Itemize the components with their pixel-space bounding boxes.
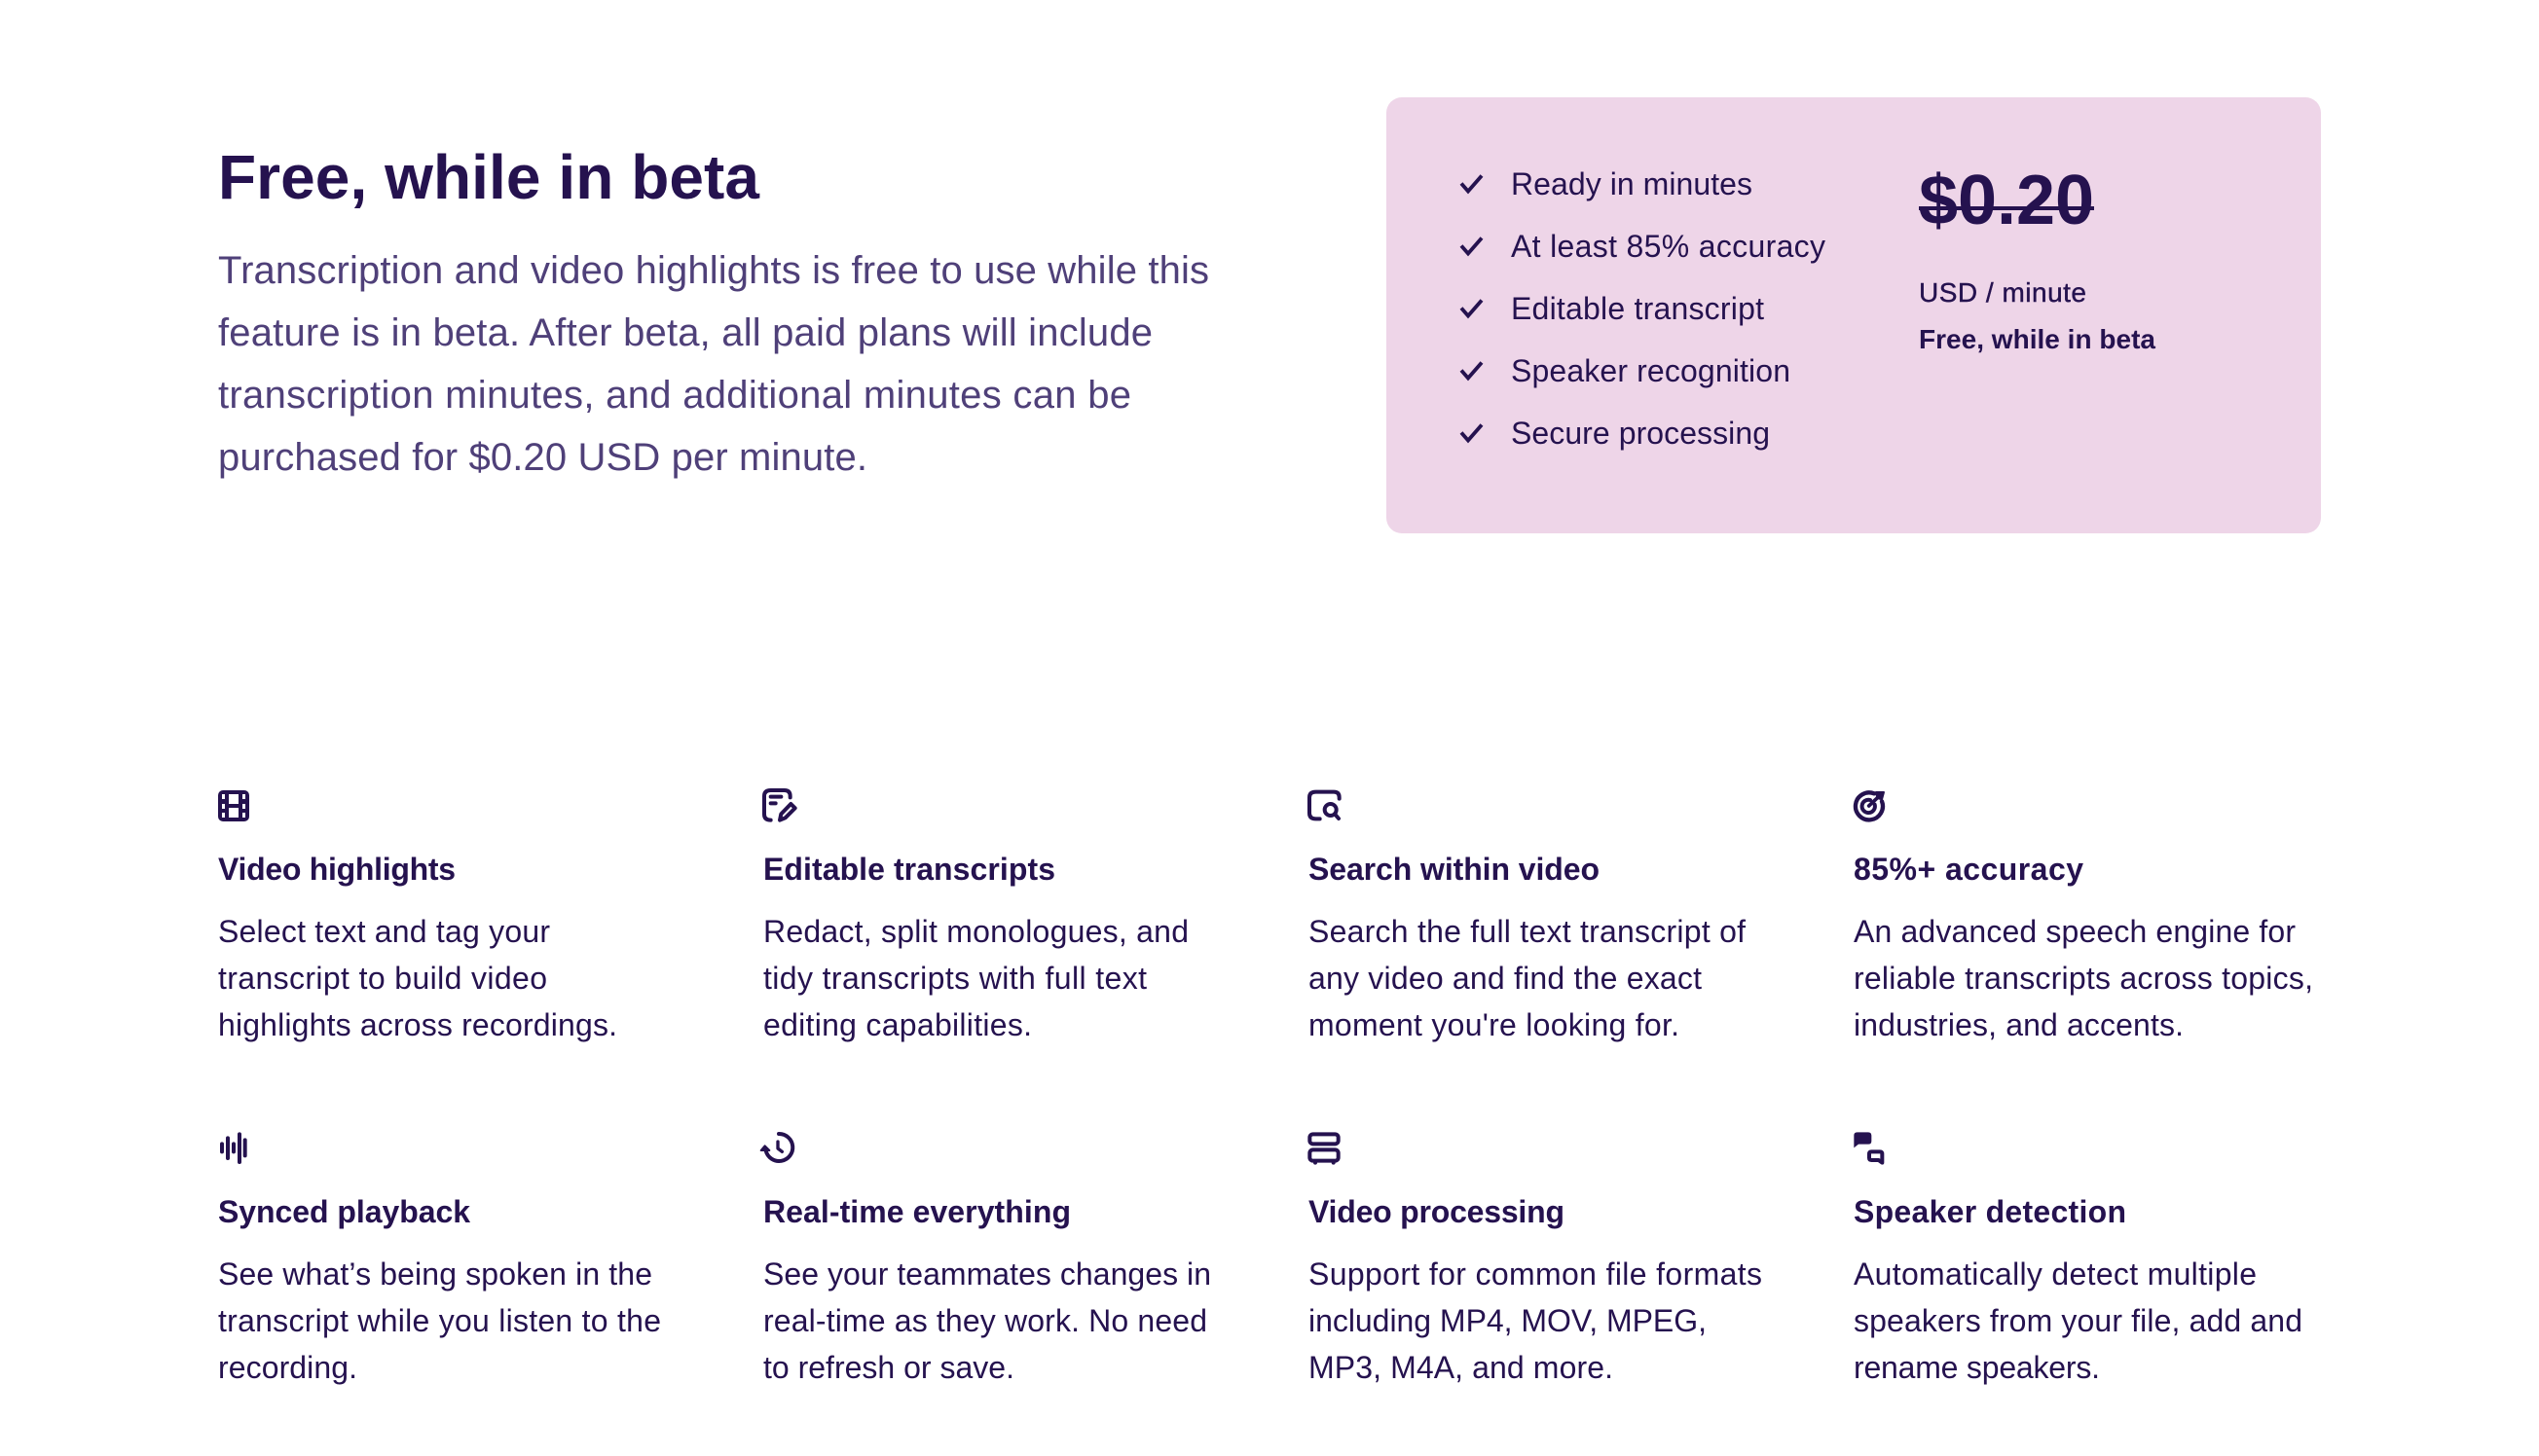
feature: video processing: Video processing xyxy=(1308,1194,1564,1229)
checklist: Secure processing xyxy=(1511,416,1770,451)
feature: video highlights: transcript to build video xyxy=(218,961,547,996)
intro paragraph: purchased for $0.20 USD per minute. xyxy=(218,436,867,479)
checklist: Speaker recognition xyxy=(1511,353,1790,388)
feature: speaker detection: Speaker detection xyxy=(1854,1194,2126,1229)
intro paragraph: Transcription and video highlights is free to use while this xyxy=(218,249,1209,292)
feature: synced playback: Synced playback xyxy=(218,1194,470,1229)
feature: video processing xyxy=(1308,1134,1762,1385)
feature: accuracy: industries, and accents. xyxy=(1854,1007,2184,1042)
struck-through price: $0.20 xyxy=(1919,162,2094,239)
icon: clock with arrow xyxy=(761,1134,792,1161)
feature: accuracy: 85%+ accuracy xyxy=(1854,852,2083,887)
icon: target xyxy=(1856,792,1884,819)
feature: video highlights: Video highlights xyxy=(218,852,456,887)
checklist xyxy=(1461,166,1825,451)
price note: Free, while in beta xyxy=(1919,324,2155,354)
feature: search within video: moment you're looking for. xyxy=(1308,1007,1679,1042)
feature: speaker detection xyxy=(1854,1132,2302,1385)
checklist: Editable transcript xyxy=(1511,291,1764,326)
intro paragraph: transcription minutes, and additional minutes can be xyxy=(218,374,1131,417)
price unit: USD / minute xyxy=(1919,277,2086,308)
feature: video processing: MP3, M4A, and more. xyxy=(1308,1350,1613,1385)
feature: editable transcripts xyxy=(763,790,1189,1042)
feature: video highlights: Select text and tag your xyxy=(218,914,550,949)
icon: note with pencil xyxy=(764,790,795,820)
feature: real-time everything: to refresh or save. xyxy=(763,1350,1014,1385)
checklist: Ready in minutes xyxy=(1511,166,1752,201)
feature: editable transcripts: editing capabilities. xyxy=(763,1007,1032,1042)
feature: accuracy: An advanced speech engine for xyxy=(1854,914,2296,949)
feature: real-time everything: real-time as they work. No need xyxy=(763,1303,1207,1338)
feature: synced playback: recording. xyxy=(218,1350,357,1385)
feature: search within video: Search the full text transcript of xyxy=(1308,914,1746,949)
feature: video highlights xyxy=(218,790,617,1042)
feature: search within video: Search within video xyxy=(1308,852,1600,887)
feature: editable transcripts: Redact, split monologues, and xyxy=(763,914,1189,949)
icon: screen with magnifier xyxy=(1309,792,1340,819)
feature: video processing: including MP4, MOV, MPEG, xyxy=(1308,1303,1707,1338)
feature: editable transcripts: tidy transcripts with full text xyxy=(763,961,1147,996)
title: Free, while in beta xyxy=(218,142,759,212)
feature: accuracy: reliable transcripts across topics, xyxy=(1854,961,2313,996)
feature: editable transcripts: Editable transcripts xyxy=(763,852,1055,887)
feature: synced playback: transcript while you listen to the xyxy=(218,1303,661,1338)
feature: speaker detection: Automatically detect multiple xyxy=(1854,1256,2257,1292)
checklist: At least 85% accuracy xyxy=(1511,229,1825,264)
feature: real-time everything: Real-time everything xyxy=(763,1194,1071,1229)
panel: pricing card xyxy=(1386,97,2321,533)
feature: video processing: Support for common file formats xyxy=(1308,1256,1762,1292)
feature: real-time everything: See your teammates changes in xyxy=(763,1256,1211,1292)
feature: synced playback xyxy=(218,1134,661,1385)
feature: speaker detection: speakers from your file, add and xyxy=(1854,1303,2302,1338)
feature: speaker detection: rename speakers. xyxy=(1854,1350,2100,1385)
feature: real-time everything xyxy=(761,1134,1211,1385)
intro paragraph xyxy=(218,249,1209,479)
feature: search within video: any video and find the exact xyxy=(1308,961,1702,996)
icon: film grid xyxy=(218,790,249,821)
icon: waveform xyxy=(222,1134,245,1162)
icon: stacked servers xyxy=(1309,1134,1339,1163)
feature: accuracy xyxy=(1854,792,2313,1042)
feature: video highlights: highlights across recordings. xyxy=(218,1007,617,1042)
icon: speech bubbles xyxy=(1854,1132,1882,1163)
intro paragraph: feature is in beta. After beta, all paid plans will include xyxy=(218,311,1153,354)
feature: synced playback: See what’s being spoken in the xyxy=(218,1256,652,1292)
feature: search within video xyxy=(1308,792,1746,1042)
